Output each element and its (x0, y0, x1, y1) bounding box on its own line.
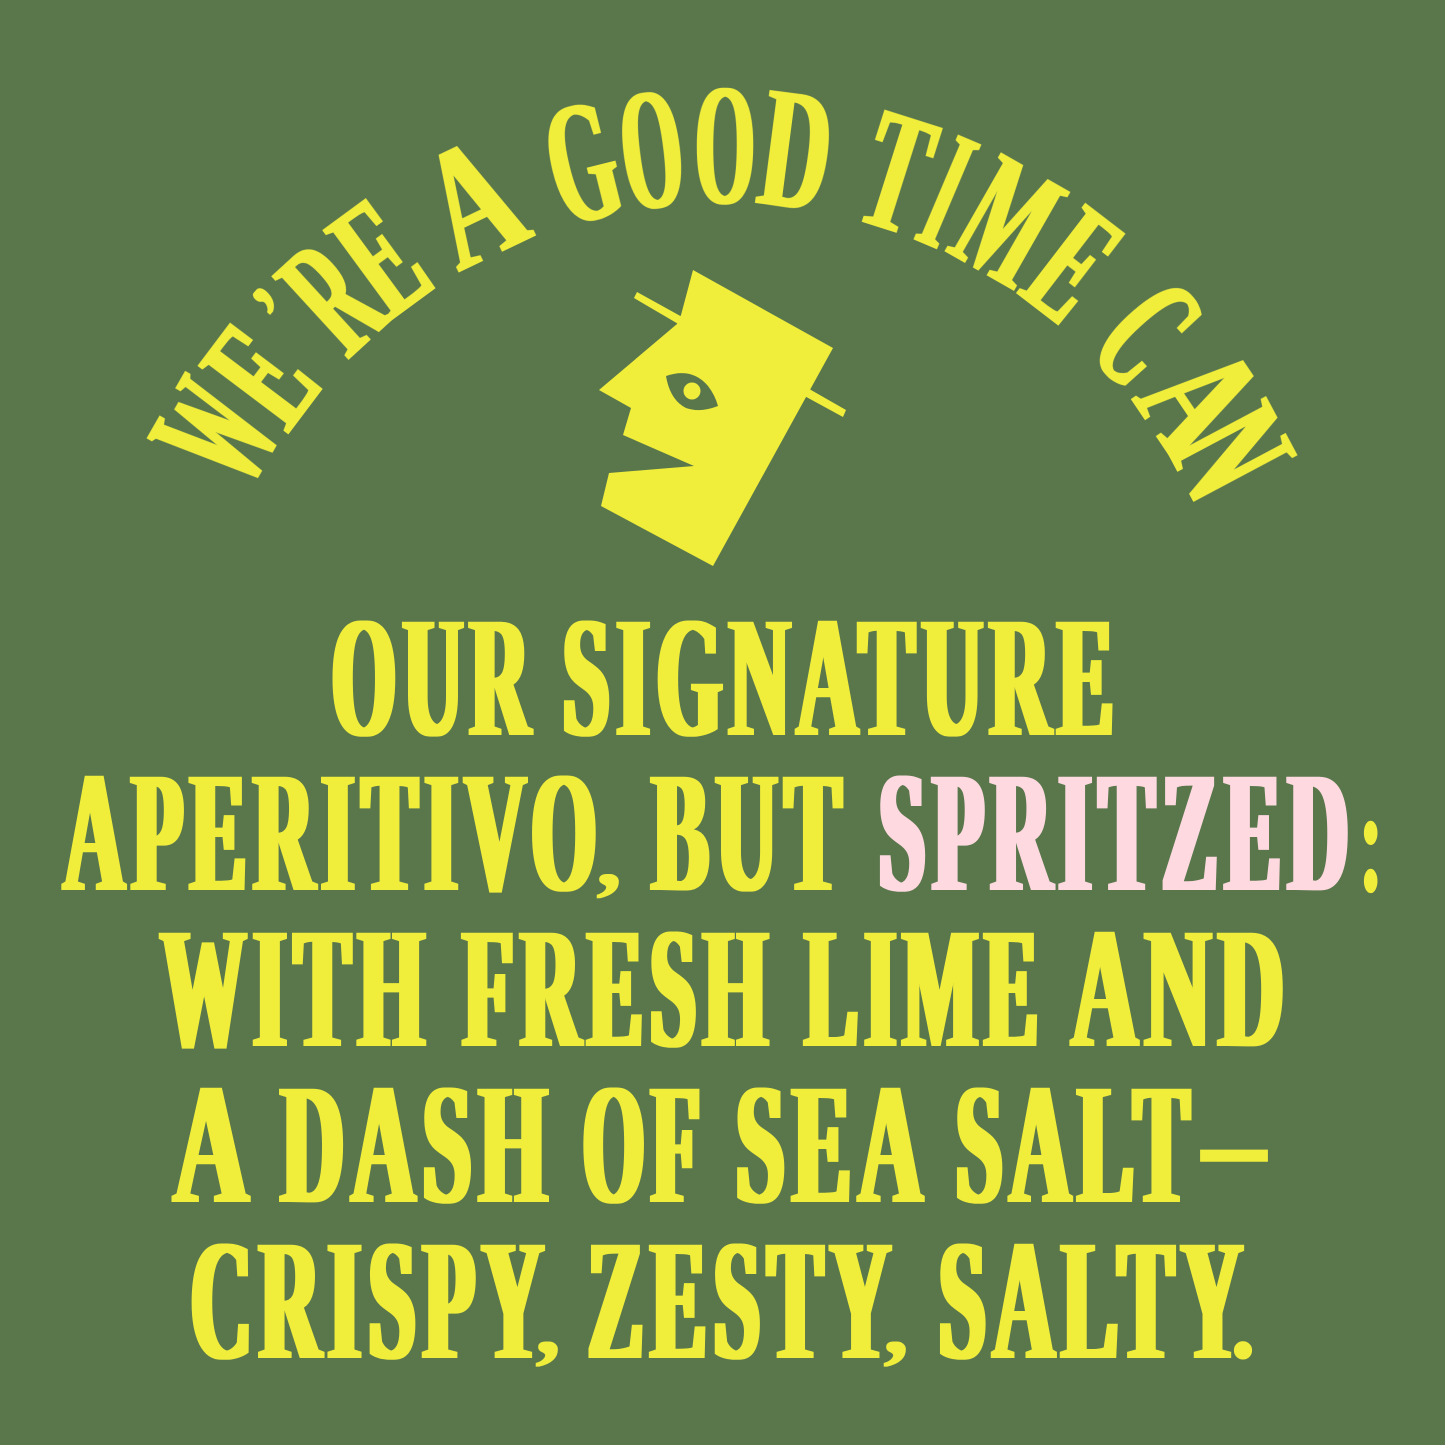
curved heading: A (392, 96, 552, 306)
curved heading: E (165, 293, 355, 457)
curved heading: E (298, 161, 461, 352)
body text line 5: . (1229, 1259, 1257, 1383)
body text line 3: FRESH (463, 893, 775, 1084)
body text line 5: ZESTY (588, 1205, 898, 1396)
curved heading: W (111, 351, 317, 513)
icon: angular face with hat (599, 270, 846, 566)
body text line 1 (332, 582, 1121, 773)
curved heading: T (839, 71, 955, 273)
body text line 4 (174, 1043, 1268, 1240)
body text line 2: BUT (652, 737, 849, 928)
body text line 3 (161, 893, 1292, 1084)
body text line 4: – (1199, 1043, 1268, 1234)
body text line 5: , (884, 1280, 908, 1373)
body text line 5: CRISPY (191, 1205, 551, 1396)
body text line 5: , (536, 1280, 560, 1373)
body text line 5 (191, 1205, 1257, 1396)
curved heading: N (1132, 377, 1333, 526)
curved heading: C (1058, 246, 1239, 418)
body text line 4: OF (583, 1049, 707, 1240)
body text line 4: DASH (281, 1049, 555, 1240)
curved heading: R (244, 204, 419, 388)
body text line 4: A (174, 1049, 248, 1240)
body text line 1: OUR (332, 582, 537, 773)
curved heading: G (527, 60, 637, 263)
curved heading: ’ (235, 271, 320, 352)
curved heading: O (610, 49, 693, 248)
curved heading: I (898, 97, 998, 284)
curved heading: M (926, 117, 1091, 324)
body text line 2: APERITIVO (64, 737, 604, 928)
curved heading: A (1100, 313, 1303, 486)
curved heading: D (750, 49, 843, 249)
body text line 4: SEA (736, 1049, 930, 1240)
body text line 2: : (1357, 758, 1385, 924)
curved heading (111, 48, 1333, 526)
body text line 4: SALT (956, 1049, 1197, 1240)
body text line 2: , (597, 816, 621, 904)
curved heading: E (993, 170, 1155, 358)
body text line 3: WITH (161, 893, 432, 1084)
body text line 3: LIME (805, 893, 1045, 1084)
curved heading: O (695, 48, 756, 241)
